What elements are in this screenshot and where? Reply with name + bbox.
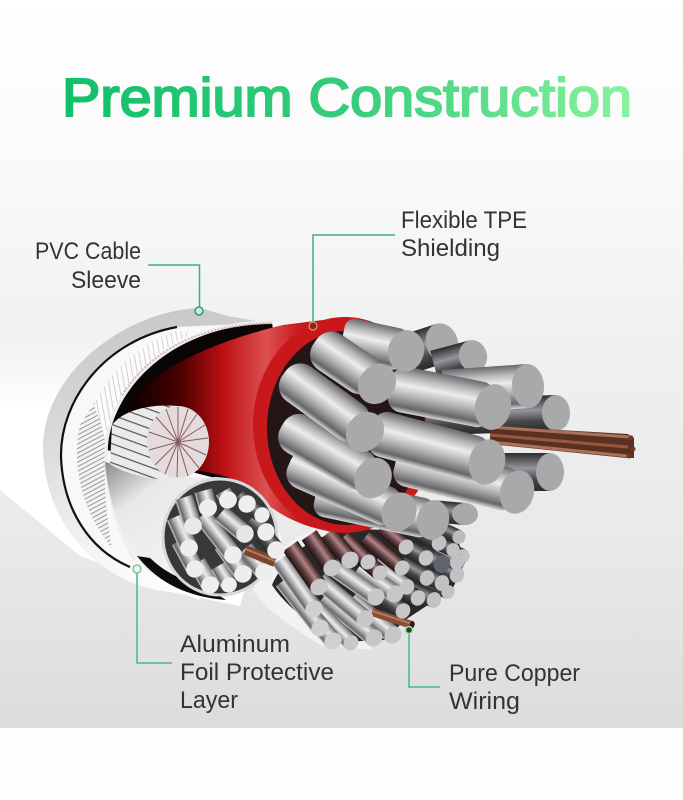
aluminum foil braid [61,322,280,600]
copper wires, small cable [243,545,277,567]
end face with radial strands [147,406,209,478]
top lip of the sleeve [122,323,272,395]
callout: aluminum foil protective layer: Layer [180,687,238,714]
foil inner edge [106,322,272,560]
strand group, small cable [167,487,288,597]
callout: pure copper wiring: Pure Copper [449,660,580,687]
lower small cable [253,520,472,654]
copper core bundle [490,426,636,458]
callout: flexible TPE shielding [309,207,527,330]
central twisted wire [110,406,209,479]
callout: pure copper wiring [406,626,580,715]
callout: aluminum foil protective layer [133,565,334,714]
large aluminum rods [272,317,636,543]
inner cavity [107,323,300,500]
copper wires, lower cable [371,608,416,630]
red TPE shielding [118,317,437,533]
callout: PVC cable sleeve: PVC Cable [35,238,141,265]
cable illustration [0,308,636,654]
strand group, lower cable [272,520,472,654]
callout: PVC cable sleeve: Sleeve [71,267,141,294]
callout: aluminum foil protective layer: Foil Protective [180,659,334,686]
callout: PVC cable sleeve [35,238,203,315]
callout: flexible TPE shielding: Flexible TPE [401,207,527,234]
PVC outer sleeve [43,308,300,606]
callout: flexible TPE shielding: Shielding [401,235,500,262]
callout: aluminum foil protective layer: Aluminum [180,631,290,658]
title: Premium Construction [62,68,632,128]
white cable body fading into the page [0,330,200,600]
small cable with white sheath [105,462,288,600]
callout: pure copper wiring: Wiring [449,688,520,715]
